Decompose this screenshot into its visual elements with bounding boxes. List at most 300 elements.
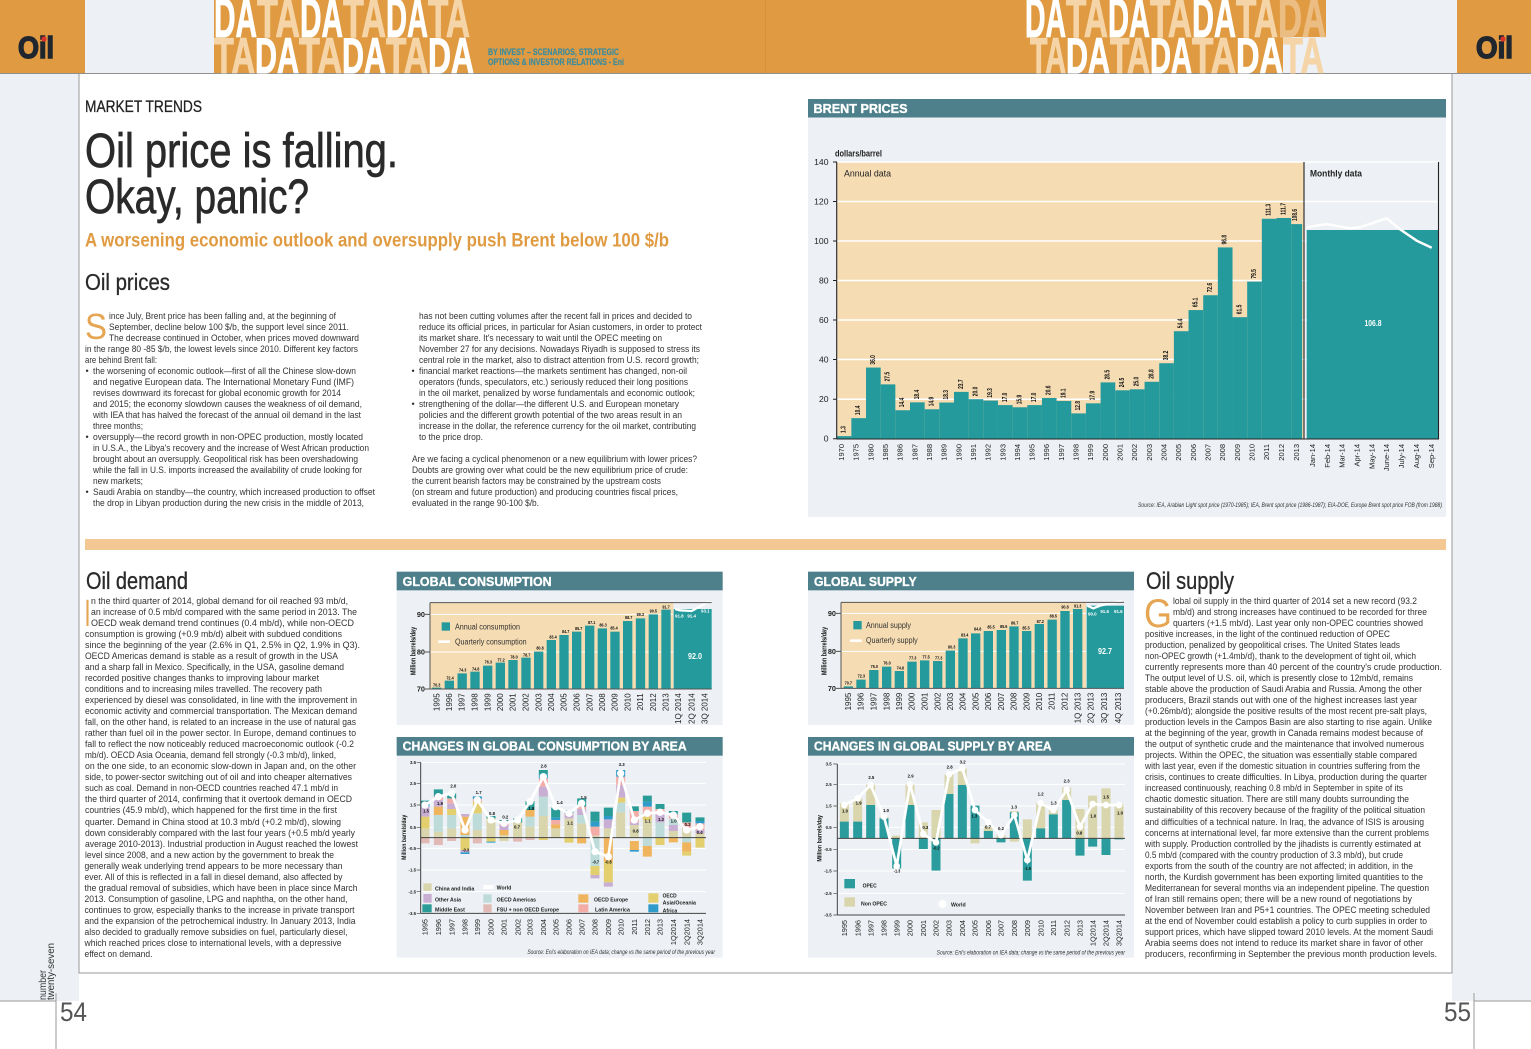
chart: global supply bars: 91.6 [1114,609,1123,615]
x axis labels: 1989 [940,444,949,461]
value labels [838,203,1299,433]
x axis labels: 1993 [998,444,1007,461]
text block: oil prices column two [412,311,702,508]
x axis labels: Sep-14 [1427,444,1436,468]
text block: oil prices column one: while the fall in U.S. imports increased the availability of crude looking for [92,465,362,475]
text block: oil supply: with last year, even if the domestic situation in countries suffering from the [1144,761,1420,771]
text block: oil prices column two: November 27 for any decisions. Nowadays Riyadh is supposed to stress its [419,344,700,354]
text block: oil demand: conditions and to increasing miles travelled. The recovery path [85,684,322,694]
legend: consumption by area [422,883,697,914]
chart: global consumption bars: Quarterly consumption [455,637,527,646]
chart: global supply bars: 92.7 [1098,647,1112,656]
text block: oil demand: n the third quarter of 2014, global demand for oil reached 93 mb/d, [91,596,348,606]
banner graphic: DATA right: DA [1066,28,1110,84]
logo: Oil left: Oil [18,30,54,65]
text block: oil prices column one: in the range 80 -85 $/b, the lowest levels since 2010. Different key factors [85,344,358,354]
x axis labels: 1997 [866,920,875,936]
x axis labels: 1Q2014 [669,919,678,945]
series: OECD Americas [438,797,687,866]
x axis labels: 1995 [840,920,849,936]
x axis labels: 2006 [984,920,993,936]
text block: oil prices column two: its market share. It's necessary to wait until the OPEC meeting on [419,333,662,343]
legend: consumption by area: China and India [435,886,475,892]
value labels: -1.9 [1024,866,1031,872]
x axis labels: 2008 [1010,920,1019,936]
x axis labels: 1996 [853,920,862,936]
x axis labels: 2011 [636,693,645,711]
x axis labels: 2013 [662,693,671,711]
x axis labels: 2007 [1204,444,1212,461]
legend: consumption by area: Latin America [595,907,631,913]
x axis labels: 2000 [1101,444,1110,461]
x axis labels: 1995 [1028,444,1037,461]
divider band [85,539,1446,550]
chart: global supply bars: 85.5 [1022,626,1030,632]
y axis labels: 0.5 [826,825,832,830]
value labels: 1.8 [528,806,535,812]
axis labels: 90 [417,610,425,619]
text block: oil supply: with supply. Production controlled by the jihadists is currently estimated at [1144,839,1421,849]
text block: oil supply: chaotic domestic situation. There are still many doubts surrounding the [1145,794,1409,804]
x axis labels: 2012 [649,693,658,711]
x axis labels: July-14 [1397,444,1406,468]
issue label [38,943,57,1000]
text block: oil supply: production, penalized by geopolitical crises. The United States leads [1145,640,1400,650]
series: World line [421,770,704,860]
x axis labels: 2012 [1061,692,1070,710]
chart: global supply bars: 91.3 [1074,604,1082,610]
text block: oil supply: at the beginning of the year, growth in Canada remains modest because of [1145,728,1423,738]
logo: Oil right: Oil [1476,30,1513,65]
x axis labels: 1Q2014 [1088,920,1097,946]
value labels: 0.8 [633,829,639,835]
x axis labels: 2007 [577,919,586,935]
text block: oil supply: concerns at international level, far more extensive than the current problems [1145,828,1429,838]
value labels: 61.5 [1234,305,1243,314]
x axis labels: 2000 [487,919,496,935]
x axis labels: 2003 [1145,444,1154,461]
monthly price line [1307,218,1432,248]
text block: oil demand: economic activity and commercial transportation. The Mexican demand [85,706,357,716]
legend: consumption by area: FSU + non OECD Europe [497,907,559,913]
text block: oil demand: also decided to gradually remove subsidies on fuel, particularly diesel, [84,927,348,937]
text block: oil supply: stable above the production of Saudi Arabia and Russia. Among the other [1145,684,1422,694]
series: China and India [425,812,700,841]
series: OPEC [844,785,1119,881]
text block: oil prices column one: revises downward its forecast for global economic growth for 2014 [93,388,341,398]
x axis labels: 1997 [1057,444,1066,461]
value labels: 1.7 [476,790,482,796]
text block: oil prices column two: operators (funds, speculators, etc.) seriously reduced their long positions [419,377,688,387]
chart: global consumption bars: 91.8 [675,614,684,620]
value labels: 3.3 [619,762,625,768]
legend: supply by area: World [951,902,966,908]
x axis labels: 3Q2014 [696,919,705,945]
heading: changes in global consumption: CHANGES IN GLOBAL CONSUMPTION BY AREA [403,740,687,754]
chart: global consumption bars: 74.3 [459,668,467,674]
x axis labels: 2002 [522,693,531,711]
banner graphic: DATA right: TA [1110,28,1150,84]
issue label: number [38,969,49,1000]
text block: oil supply: support prices, which have slipped toward 2010 levels. At the moment Saudi [1145,927,1433,937]
text block: oil demand: and the expansion of the petrochemical industry. In January 2013, India [84,916,356,926]
text block: oil demand: fall, on the other hand, is related to an increase in the use of natural gas [85,717,356,727]
text block: oil supply: The output level of U.S. oil, which is presently close to 12mb/d, remains [1145,673,1413,683]
series: Latin America [438,777,700,836]
x axis labels: 4Q 2013 [1114,692,1123,723]
value labels: 1.0 [1117,810,1123,816]
chart: global consumption bars: 86.3 [599,623,607,629]
value labels: -1.3 [894,869,901,875]
x axis labels: 3Q 2014 [701,693,710,724]
value labels: 1.5 [423,809,429,815]
chart: global consumption bars: 91.7 [662,604,670,610]
text block: oil prices column one: oversupply—the record growth in non-OPEC production, mostly located [93,432,363,442]
page number 54: 54 [60,997,87,1027]
chart: global consumption bars: 83.4 [549,635,557,641]
value labels: 0.3 [922,825,929,831]
text block: oil prices column two: Are we facing a cyclical phenomenon or a new equilibrium with lower prices? [412,454,697,464]
text block: oil demand: rather than fuel oil in the power sector. In Europe, demand continues to [85,728,356,738]
text block: oil supply: producers, Brazil stands out with one of the highest increases last year [1145,695,1417,705]
chart: global supply bars: 85.6 [1000,624,1008,630]
heading: brent prices: BRENT PRICES [814,102,908,116]
chart: global supply bars [819,601,1124,723]
text block: oil prices column one: and 2015; the economy slowdown causes the weakness of oil demand, [93,399,362,409]
axis labels: 120 [814,196,829,206]
text block: oil prices column two: in the oil market, penalized by worse fundamentals and economic outlook; [419,388,695,398]
legend: consumption by area: Middle East [435,907,465,913]
value labels: 17.0 [1029,393,1038,402]
x axis labels: 2001 [509,693,518,711]
value labels: 24.5 [1117,378,1126,387]
value labels: 1.0 [842,809,848,815]
x axis labels: 1998 [880,920,889,936]
byline: OPTIONS & INVESTOR RELATIONS - Eni [488,57,624,67]
text block: oil prices column one: in U.S.A., the Libya's recovery and the increase of West African production [93,443,369,453]
chart: consumption by area stacked bars [401,760,706,945]
text block: oil supply: (+0.26mb/d); alongside the positive results of the most recent pre-salt plays, [1145,706,1427,716]
value labels: 0.8 [1076,830,1083,836]
text block: oil demand: generally weak underlying trend appears to be more necessary than [84,861,342,871]
legend: consumption by area: Other Asia [435,897,462,903]
chart: global supply bars: 75.0 [871,664,878,670]
value labels: 18.4 [912,389,921,399]
value labels: 70.3 [433,682,441,688]
value labels: 108.6 [1290,209,1299,221]
x axis labels: 2013 [1076,920,1085,936]
title: Okay, panic? [85,171,309,224]
x axis labels [844,692,1123,723]
axis labels: 90 [828,609,836,618]
legend: consumption by area: Africa [663,908,678,914]
series: Middle East [425,770,700,822]
text block: oil prices column two: policies and the different growth potential of the two areas result in an [419,410,682,420]
value labels: 17.0 [1000,393,1009,402]
y axis labels: 3.5 [410,760,417,765]
x axis labels: 2011 [630,919,639,935]
value labels: 0.2 [685,822,691,828]
chart: global supply bars: 83.4 [961,632,969,638]
axis labels: 140 [814,157,829,167]
heading: oil demand: Oil demand [86,568,188,595]
text block: oil prices column one: • [86,487,89,497]
chart: brent bar chart: Annual data [844,169,891,179]
text block: oil demand: ever. All of this is reflected in a fall in diesel demand, also affected by [84,872,343,882]
x axis labels: 2010 [1036,920,1045,936]
text block: oil prices column one: and negative European data. The International Monetary Fund (IMF) [93,377,354,387]
x axis labels: 2002 [933,692,942,710]
text block: oil demand: since the beginning of the year (2.6% in Q1, 2.5% in Q2, 1.9% in Q3). [85,640,360,650]
legend [442,622,450,631]
text block: oil demand [84,593,360,959]
chart: global supply bars: 85.5 [987,625,995,631]
x axis labels: 2Q 2014 [687,693,696,724]
chart: global supply bars: Annual supply [866,621,911,630]
chart: global consumption bars: 89.3 [637,612,644,618]
text block: oil demand: experienced by diesel was consolidated, in line with the improvement in [85,695,357,705]
value labels [423,762,703,865]
x axis labels: 2Q 2013 [1087,692,1096,723]
text block: oil demand: recorded positive changes thanks to improving labour market [85,673,319,683]
axis labels: 40 [819,354,829,364]
text block: oil demand: level since 2008, and a new action by the government to break the [85,850,334,860]
x axis labels: 2008 [591,919,600,935]
text block: oil prices column one: September, decline below 100 $/b, the support level since 2011. [109,322,349,332]
x axis labels: Mar-14 [1338,444,1347,468]
text block: oil demand: mb/d). OECD Asia Oceania, demand fell strongly (-0.3 mb/d), linked, [85,750,336,760]
text block: oil demand: the third quarter of 2014, confirming that it overtook demand in OECD [85,794,352,804]
x axis labels: 1999 [1086,444,1095,461]
x axis labels: 2006 [984,692,993,710]
monthly bars [1307,230,1438,439]
x axis labels: 1999 [483,693,492,711]
text block: oil prices column one: The decrease continued in October, when prices moved downward [109,333,359,343]
x axis labels: 2012 [1062,920,1071,936]
text block: oil supply: and difficulties of a technical nature. In Iraq, the advance of ISIS is arousing [1145,817,1424,827]
value labels: 17.9 [1088,391,1097,400]
value labels: 0.2 [502,814,509,820]
value labels: 1.5 [1103,794,1109,800]
text block: oil supply: quarters (+1.5 mb/d). Last year only non-OPEC countries showed [1173,618,1423,628]
text block: oil demand: side, to power-sector switching out of oil and into cheaper alternatives [85,772,352,782]
axis labels [814,157,829,444]
x axis labels: 1998 [882,692,891,710]
text block: oil demand: effect on demand. [84,949,152,959]
chart: global consumption bars: 78.7 [523,652,531,658]
x axis labels: 1990 [954,444,963,461]
x axis labels: 2011 [1049,920,1058,936]
value labels: 0.4 [697,830,703,836]
chart: global supply bars: 80.3 [948,644,956,650]
banner graphic: DATA left: DA [342,28,386,84]
x axis labels: 2005 [560,693,569,711]
banner graphic: DATA right: TA [1030,28,1066,84]
x axis labels: 2009 [1023,920,1032,936]
x axis labels: 2004 [539,919,548,935]
chart: global supply bars: 70 [828,684,836,693]
text block: oil supply: north, the Kurdish government has been exporting limited quantities to the [1145,872,1423,882]
text block: oil prices column two: the current bearish factors may be constrained by the upstream costs [412,476,661,486]
chart: global consumption bars: Annual consumption [455,622,520,631]
x axis labels: 2005 [551,919,560,935]
y axis labels: 2.5 [826,782,832,787]
text block: oil demand: on the one side, to an economic slow-down in Japan and, on the other [85,761,356,771]
byline [488,47,624,67]
chart: global supply bars: 77.3 [909,655,917,661]
banner graphic: DATA right: DA [1236,28,1283,84]
text block: oil supply: the output of synthetic crude and the maintenance that involved numerous [1145,739,1424,749]
value labels: 2.8 [541,764,547,770]
x axis labels: 2003 [946,692,955,710]
legend [853,621,862,629]
text block: oil prices column two: strengthening of the dollar—the different U.S. and European monetary [419,399,679,409]
series: Non OPEC [844,768,1119,843]
value labels: 27.5 [882,372,892,381]
x axis labels: Jan-14 [1308,444,1317,467]
text block: oil supply [1144,592,1442,959]
value labels: 20.6 [1044,386,1053,395]
series: FSU + non OECD Europe [425,838,530,845]
x axis labels: 1997 [869,692,878,710]
x axis labels [432,693,710,724]
text block: oil prices column one [85,306,375,508]
value labels: 12.8 [1073,401,1082,410]
value labels: 1.9 [437,801,443,807]
value labels: 0.7 [514,824,520,830]
issue label: twenty-seven [46,943,57,1000]
text block: oil prices column one: • [86,432,89,442]
x axis labels: 1999 [895,692,904,710]
text block: oil prices column one: three months; [93,421,143,431]
legend: supply by area [844,879,966,908]
x axis labels: 2005 [971,692,980,710]
x axis labels: 2011 [1048,692,1057,710]
legend: supply by area: OPEC [863,884,877,890]
y axis labels: 1.5 [410,803,417,808]
x axis labels: 1994 [1013,444,1022,461]
axis labels: 80 [819,276,829,286]
x axis labels: 1980 [866,444,875,461]
x axis labels: 2010 [616,919,625,935]
text block: oil prices column one: the worsening of economic outlook—first of all the Chinese slow-down [93,366,356,376]
value labels: 1.1 [645,818,651,824]
chart: brent bar chart [814,149,1439,471]
x axis labels: 1970 [837,444,846,461]
value labels: 10.4 [853,405,862,415]
chart: global consumption bars: 74.8 [472,666,480,672]
x axis labels [421,919,705,945]
chart: global consumption bars: 90.5 [650,608,657,614]
page number 55: 55 [1444,997,1471,1027]
x axis labels: 1992 [984,444,993,461]
value labels: 36.0 [868,355,877,365]
text block: oil prices column one: the drop in Libyan production during the new crisis in the middle of 2013, [93,498,364,508]
y axis labels [409,760,417,916]
banner graphic: DATA left: DA [255,28,299,84]
x axis labels: May-14 [1367,444,1376,469]
text block: oil supply: projects. Within the OPEC, the situation was essentially stable compared [1145,750,1417,760]
y axis labels: -1.5 [824,869,832,874]
chart: brent bar chart: Monthly data [1310,169,1363,179]
banner graphic: DATA right [1025,0,1326,84]
value labels: 2.9 [908,773,914,779]
value labels: 1.3 [838,426,848,433]
text block: oil supply: crisis, continues to create difficulties. In Libya, production during the quarter [1145,772,1427,782]
x axis labels: 1Q 2013 [1073,692,1082,723]
text block: oil supply: G [1144,592,1172,636]
chart: global consumption bars: 93.1 [701,609,710,615]
axis labels: 60 [819,315,829,325]
text block: oil demand: an increase of 0.5 mb/d compared with the same period in 2013. The [91,607,357,617]
x axis labels: 1975 [852,444,861,461]
x axis labels: 2012 [1277,444,1286,461]
x axis labels: 1996 [434,919,443,935]
axis labels: 100 [814,236,829,246]
x axis labels: 2003 [534,693,543,711]
x axis labels: 3Q2014 [1115,920,1124,946]
text block: oil demand: countries (45.9 mb/d), which happened for the first time in the first [85,805,337,815]
text block: oil supply: November between Iran and P5+1 countries. The OPEC meeting scheduled [1145,905,1430,915]
text block: oil supply: sustainability of this recovery because of the fragility of the political situation [1145,805,1425,815]
series: Africa [425,770,700,854]
title [85,125,398,224]
x axis labels: 2000 [496,693,505,711]
legend: supply by area: Non OPEC [861,902,887,908]
x axis labels: 2007 [585,693,594,711]
legend: consumption by area: Asia/Oceania [663,901,697,907]
value labels: 1.5 [581,795,587,801]
text block: oil demand: OECD weak demand trend continues (0.4 mb/d), while non-OECD [91,618,354,628]
chart: global supply bars: 86.7 [1011,621,1019,627]
x axis labels: 2000 [906,920,915,936]
value labels: 96.8 [1220,235,1229,244]
value labels: 25.0 [1132,377,1141,386]
legend: consumption by area: OECD Americas [497,897,536,903]
y axis labels: 0.5 [410,825,417,830]
text block: oil prices column one: Saudi Arabia on standby—the country, which increased production to offset [93,487,375,497]
x axis labels: 2004 [1160,444,1168,461]
x axis labels: 1996 [857,692,866,710]
y axis labels: -1.5 [409,868,417,873]
chart: brent bar chart: 106.8 [1364,319,1382,328]
x axis labels: 2009 [611,693,620,711]
chart: brent bar chart: dollars/barrel [835,149,882,159]
y axis labels: 3.5 [826,762,832,767]
axis labels: 0 [824,434,829,444]
banner graphic: DATA right: TA [1283,28,1324,84]
x axis labels: 1985 [881,444,890,461]
x axis labels: June-14 [1382,444,1391,471]
text block: oil prices column two: has not been cutting volumes after the recent fall in prices and decided to [419,311,692,321]
x axis labels: 2Q2014 [682,919,691,945]
value labels: 1.3 [1051,801,1057,807]
x axis labels: 2000 [908,692,917,710]
x axis labels [840,920,1124,946]
x axis labels: 2004 [958,920,967,936]
x axis labels: 2004 [547,693,556,711]
x axis labels: 2005 [971,920,980,936]
chart: global supply bars: 88.5 [1050,613,1057,619]
text block: oil prices column two: • [412,366,415,376]
panel: brent prices [808,99,1446,517]
value labels: 1.2 [658,817,664,823]
text block: oil supply: Mediterranean for several months via an independent pipeline. The question [1145,883,1429,893]
x axis labels: 1998 [1072,444,1081,461]
text block: oil prices column one: with IEA that has halved the forecast of the annual oil demand in the last [92,410,361,420]
value labels: 111.3 [1264,204,1273,216]
chart: global supply bars: 84.8 [974,627,982,633]
